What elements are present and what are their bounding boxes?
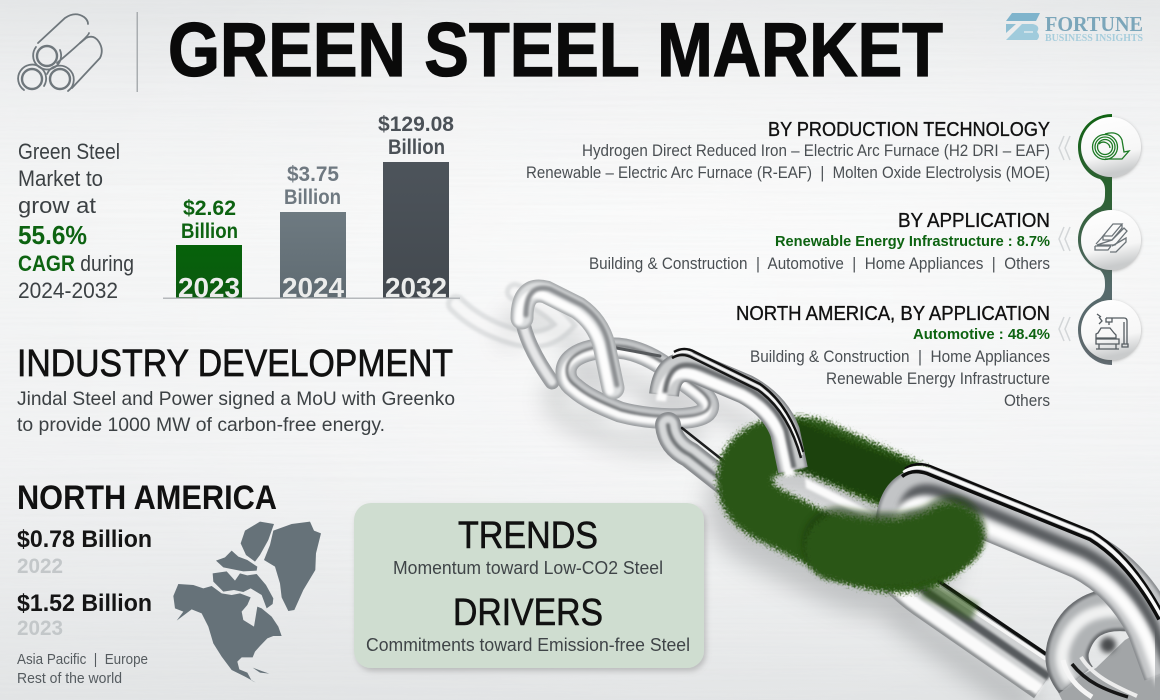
panel: trends and drivers: TRENDS	[458, 515, 598, 557]
CAGR text block: Green Steel	[18, 139, 120, 164]
north america stats: Asia Pacific | Europe	[17, 652, 148, 668]
chevrons pointing to segments	[1059, 136, 1070, 341]
segment: north america by application: Automotive : 48.4%	[913, 326, 1050, 343]
north america stats: 2023	[17, 617, 63, 640]
CAGR text block: 55.6%	[18, 220, 87, 250]
segment: north america by application	[736, 303, 1050, 410]
segment: by application: Building & Construction | Automotive | Home Appliances | Others	[589, 255, 1050, 273]
logo: Fortune Business Insights: BUSINESS INSIGHTS	[1045, 33, 1143, 44]
bar chart: market size: $2.62	[183, 197, 236, 220]
segment: by production technology	[526, 119, 1050, 182]
panel: trends and drivers: Commitments toward Emission-free Steel	[366, 635, 690, 655]
north america stats: $0.78 Billion	[17, 526, 152, 553]
north america stats: 2022	[17, 555, 63, 578]
logo: Fortune Business Insights	[1006, 12, 1143, 44]
CAGR text block: CAGR during	[18, 251, 134, 276]
segment: north america by application: NORTH AMERICA, BY APPLICATION	[736, 303, 1050, 325]
icon: car assembly robot	[1081, 300, 1141, 360]
industry development	[17, 343, 455, 436]
CAGR text block	[18, 139, 134, 303]
north america stats	[17, 479, 277, 687]
industry development: INDUSTRY DEVELOPMENT	[17, 343, 453, 385]
panel: trends and drivers	[354, 503, 704, 668]
header divider	[136, 12, 138, 92]
segment: by production technology: Renewable – Electric Arc Furnace (R-EAF) | Molten Oxide Electrolysis (MOE)	[526, 164, 1050, 182]
CAGR text block: Market to	[18, 166, 103, 191]
segment: north america by application: Renewable Energy Infrastructure	[826, 370, 1050, 388]
connector spine	[1078, 114, 1112, 365]
map: North America	[173, 522, 321, 683]
bar chart: market size: Billion	[181, 220, 238, 243]
segment: north america by application: Building & Construction | Home Appliances	[750, 348, 1050, 366]
north america stats: NORTH AMERICA	[17, 479, 277, 517]
segment: by application	[589, 210, 1050, 273]
panel: trends and drivers: Momentum toward Low-CO2 Steel	[393, 558, 663, 578]
bar chart: market size: $129.08	[378, 113, 454, 136]
industry development: to provide 1000 MW of carbon-free energy.	[17, 414, 385, 436]
title: GREEN STEEL MARKET	[168, 8, 943, 93]
industry development: Jindal Steel and Power signed a MoU with Greenko	[17, 388, 455, 410]
bar chart: market size	[163, 113, 460, 303]
segment: north america by application: Others	[1004, 392, 1050, 410]
segment: by production technology: Hydrogen Direct Reduced Iron – Electric Arc Furnace (H2 DRI – EAF)	[582, 142, 1050, 160]
chain: steel links with green link	[456, 288, 1160, 700]
segment: by application: BY APPLICATION	[898, 210, 1050, 232]
bar chart: market size: 2023	[178, 272, 240, 303]
bar chart: market size: $3.75	[287, 163, 339, 186]
logo: Fortune Business Insights: FORTUNE	[1045, 12, 1143, 36]
bar chart: market size: 2024	[282, 272, 344, 303]
north america stats: $1.52 Billion	[17, 590, 152, 617]
icon: steel coil	[1081, 117, 1141, 177]
segment: by production technology: BY PRODUCTION TECHNOLOGY	[768, 119, 1050, 141]
icon: steel pipes	[18, 14, 102, 91]
bar chart: market size: Billion	[284, 186, 341, 209]
CAGR text block: 2024-2032	[18, 278, 118, 303]
bar chart: market size: 2032	[385, 272, 447, 303]
segment: by application: Renewable Energy Infrastructure : 8.7%	[775, 233, 1050, 250]
icon: steel plates	[1081, 210, 1141, 270]
CAGR text block: grow at	[18, 193, 96, 218]
panel: trends and drivers: DRIVERS	[453, 592, 603, 634]
north america stats: Rest of the world	[17, 671, 122, 687]
bar chart: market size: Billion	[388, 136, 445, 159]
